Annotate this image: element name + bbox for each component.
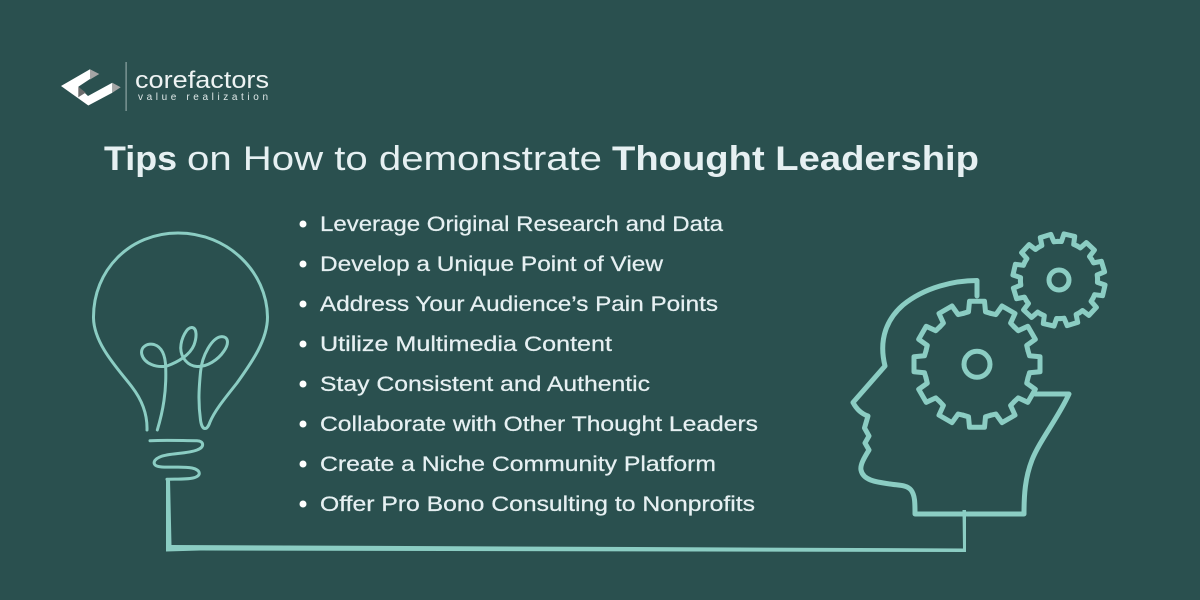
logo tagline: value realization [138, 92, 268, 103]
tips list: Develop a Unique Point of View [320, 253, 664, 276]
bullets [300, 220, 306, 508]
bulb base squiggle [150, 440, 203, 479]
logo: corefactors [61, 62, 269, 111]
icon: logo mark [61, 69, 121, 106]
title: Thought Leadership [612, 140, 979, 178]
tips list: Collaborate with Other Thought Leaders [320, 413, 758, 436]
tips list [300, 213, 758, 516]
tips list: Address Your Audience’s Pain Points [320, 293, 718, 316]
bulb outline [93, 233, 268, 430]
head outline [853, 280, 1069, 514]
title: on How to demonstrate [187, 140, 602, 178]
icon: head with gears [853, 233, 1106, 514]
tips list: Offer Pro Bono Consulting to Nonprofits [320, 493, 755, 516]
icon: light bulb [93, 233, 268, 479]
title [104, 140, 979, 178]
large gear [914, 301, 1040, 427]
tips list: Utilize Multimedia Content [320, 333, 612, 356]
logo wordmark: corefactors [135, 67, 269, 94]
tips list: Stay Consistent and Authentic [320, 373, 650, 396]
small gear [1012, 233, 1106, 327]
title: Tips [104, 140, 177, 178]
logo divider [126, 62, 127, 111]
connector wire [166, 479, 966, 552]
tips list: Create a Niche Community Platform [320, 453, 716, 476]
tips list: Leverage Original Research and Data [320, 213, 723, 236]
